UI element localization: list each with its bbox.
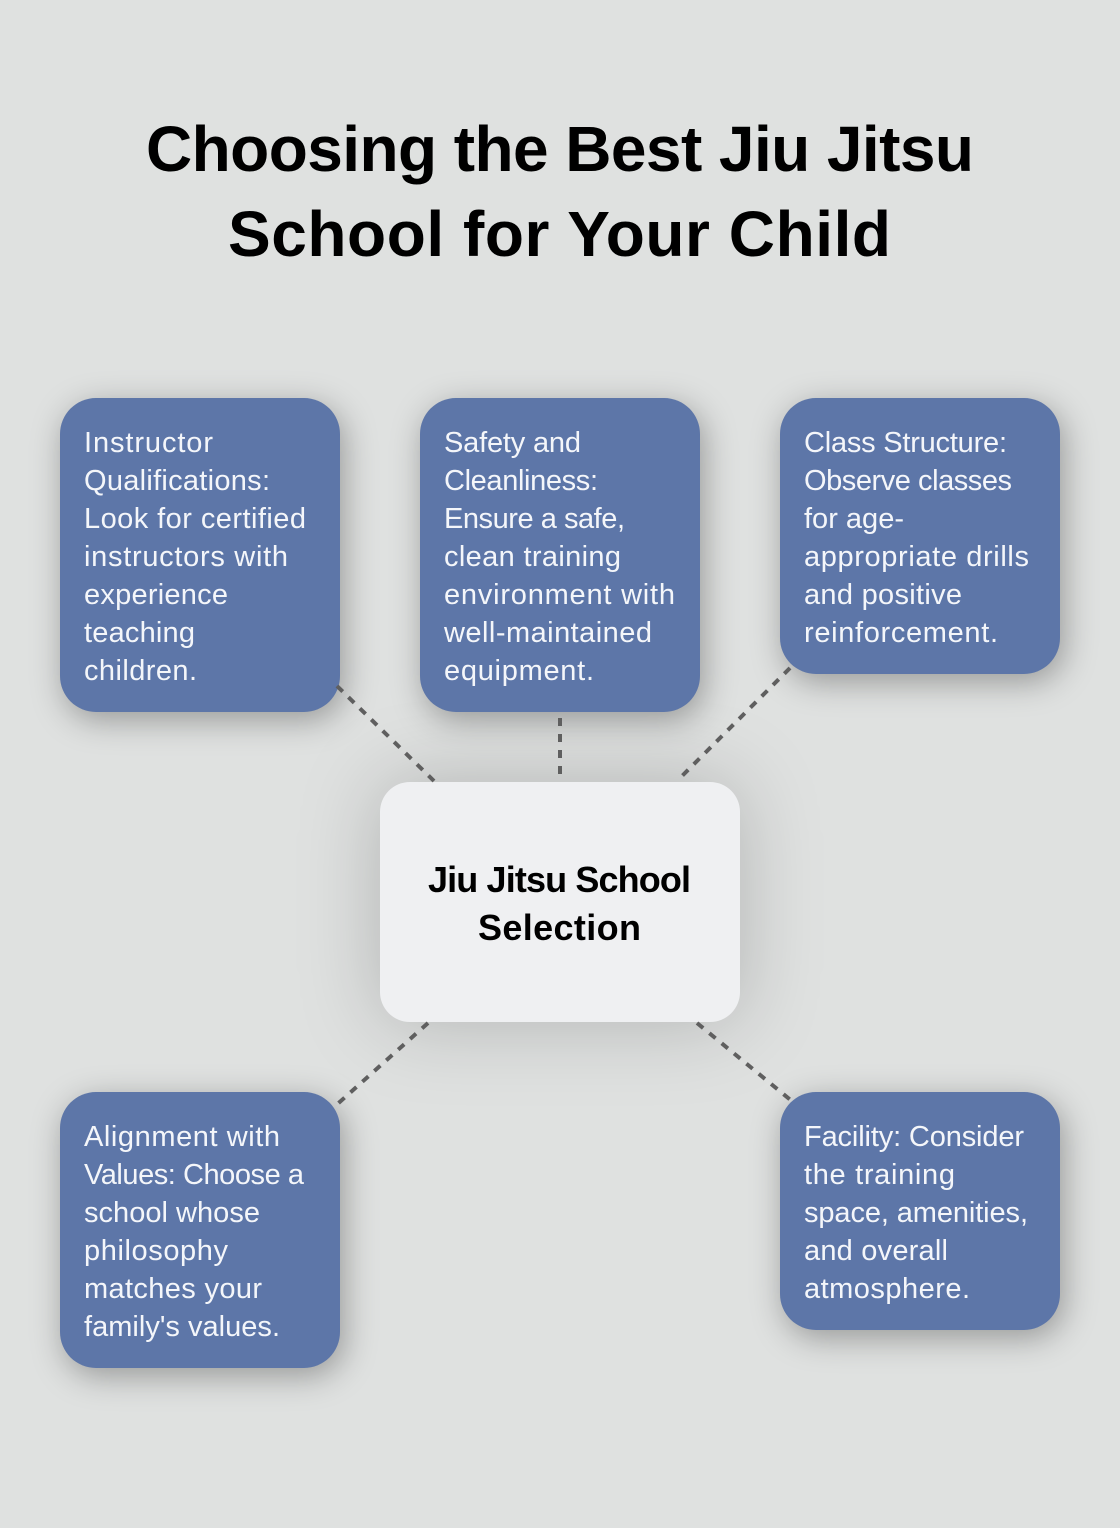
central node: Jiu Jitsu School Selection: Selection xyxy=(478,907,641,948)
panel: safety and cleanliness: clean training xyxy=(444,541,621,573)
panel: alignment with values: matches your xyxy=(84,1273,262,1305)
panel: facility: space, amenities, xyxy=(804,1197,1028,1229)
panel: instructor qualifications: Look for certified xyxy=(84,503,306,535)
panel: class structure: appropriate drills xyxy=(804,541,1029,573)
central node: Jiu Jitsu School Selection xyxy=(380,782,740,1022)
panel: safety and cleanliness: Ensure a safe, xyxy=(444,503,625,535)
panel: facility xyxy=(780,1092,1060,1330)
panel: instructor qualifications: Instructor xyxy=(84,427,213,459)
panel: class structure: Observe classes xyxy=(804,465,1012,497)
panel: facility: atmosphere. xyxy=(804,1273,970,1305)
panel: class structure: reinforcement. xyxy=(804,617,998,649)
panel: alignment with values xyxy=(60,1092,340,1368)
panel: safety and cleanliness: Cleanliness: xyxy=(444,465,598,497)
panel: instructor qualifications: children. xyxy=(84,655,197,687)
panel: safety and cleanliness xyxy=(420,398,700,712)
title: Choosing the Best Jiu Jitsu xyxy=(146,113,974,185)
panel: alignment with values: Alignment with xyxy=(84,1121,280,1153)
connector: class structure to center xyxy=(677,668,790,781)
central node: Jiu Jitsu School Selection: Jiu Jitsu School xyxy=(428,859,691,900)
panel: instructor qualifications: teaching xyxy=(84,617,195,649)
panel: class structure: for age- xyxy=(804,503,904,535)
panel: alignment with values: family's values. xyxy=(84,1311,280,1343)
title xyxy=(146,113,974,270)
connector: alignment to center xyxy=(333,1023,428,1108)
title: School for Your Child xyxy=(228,198,891,270)
panel: safety and cleanliness: well-maintained xyxy=(443,617,652,649)
panel: alignment with values: school whose xyxy=(84,1197,260,1229)
panel: class structure: and positive xyxy=(804,579,962,611)
panel: facility: the training xyxy=(804,1159,955,1191)
panel: facility: Facility: Consider xyxy=(804,1121,1024,1153)
panel: instructor qualifications xyxy=(60,398,340,712)
panel: alignment with values: philosophy xyxy=(84,1235,228,1267)
panel: safety and cleanliness: equipment. xyxy=(444,655,594,687)
panel: instructor qualifications: instructors with xyxy=(84,541,288,573)
connector: facility to center xyxy=(697,1023,793,1102)
panel: class structure xyxy=(780,398,1060,674)
panel: instructor qualifications: experience xyxy=(84,579,228,611)
panel: class structure: Class Structure: xyxy=(804,427,1007,459)
connector: instructor qualifications to center xyxy=(337,686,434,781)
panel: facility: and overall xyxy=(804,1235,948,1267)
panel: safety and cleanliness: Safety and xyxy=(444,427,581,459)
connector: safety to center xyxy=(558,718,562,774)
panel: alignment with values: Values: Choose a xyxy=(84,1159,305,1191)
panel: instructor qualifications: Qualifications: xyxy=(84,465,270,497)
panel: safety and cleanliness: environment with xyxy=(444,579,675,611)
